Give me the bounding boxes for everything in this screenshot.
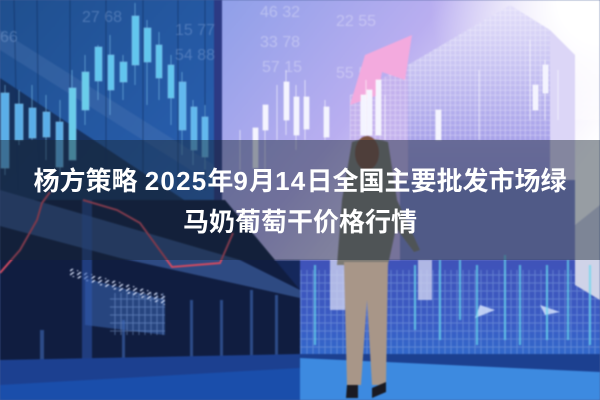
title: 马奶葡萄干价格行情 [183,207,417,237]
red trend line [0,192,233,273]
candlesticks left [1,3,208,175]
panel: upper right lavender [222,0,600,260]
title: 杨方策略 2025年9月14日全国主要批发市场绿 [34,166,566,196]
man figure [337,136,420,398]
icon: pink arrow roof [350,35,412,105]
panel: upper left dark blue [0,0,222,260]
background digits: 46 32 [260,4,300,21]
background digits: 54 88 [175,47,215,64]
suit [337,139,420,265]
street [0,354,600,400]
building right [408,5,550,260]
cyan spikes [315,255,590,345]
candlesticks right [240,40,558,175]
background digits: 27 68 [82,9,122,26]
trousers [344,262,388,385]
building lower right [575,205,600,300]
shoes [346,382,386,398]
background digits: 57 15 [262,59,302,76]
title [34,166,566,237]
panel: lower scene [0,260,600,400]
background digits: 15 77 [175,22,215,39]
background digits: 33 78 [260,34,300,51]
head [355,136,379,170]
background digits: 66 [0,29,18,46]
background digits: 55 55 [336,65,376,82]
background digits: 22 55 [336,13,376,30]
title band [0,140,600,260]
background digits [0,4,376,82]
building lower left [0,200,300,360]
